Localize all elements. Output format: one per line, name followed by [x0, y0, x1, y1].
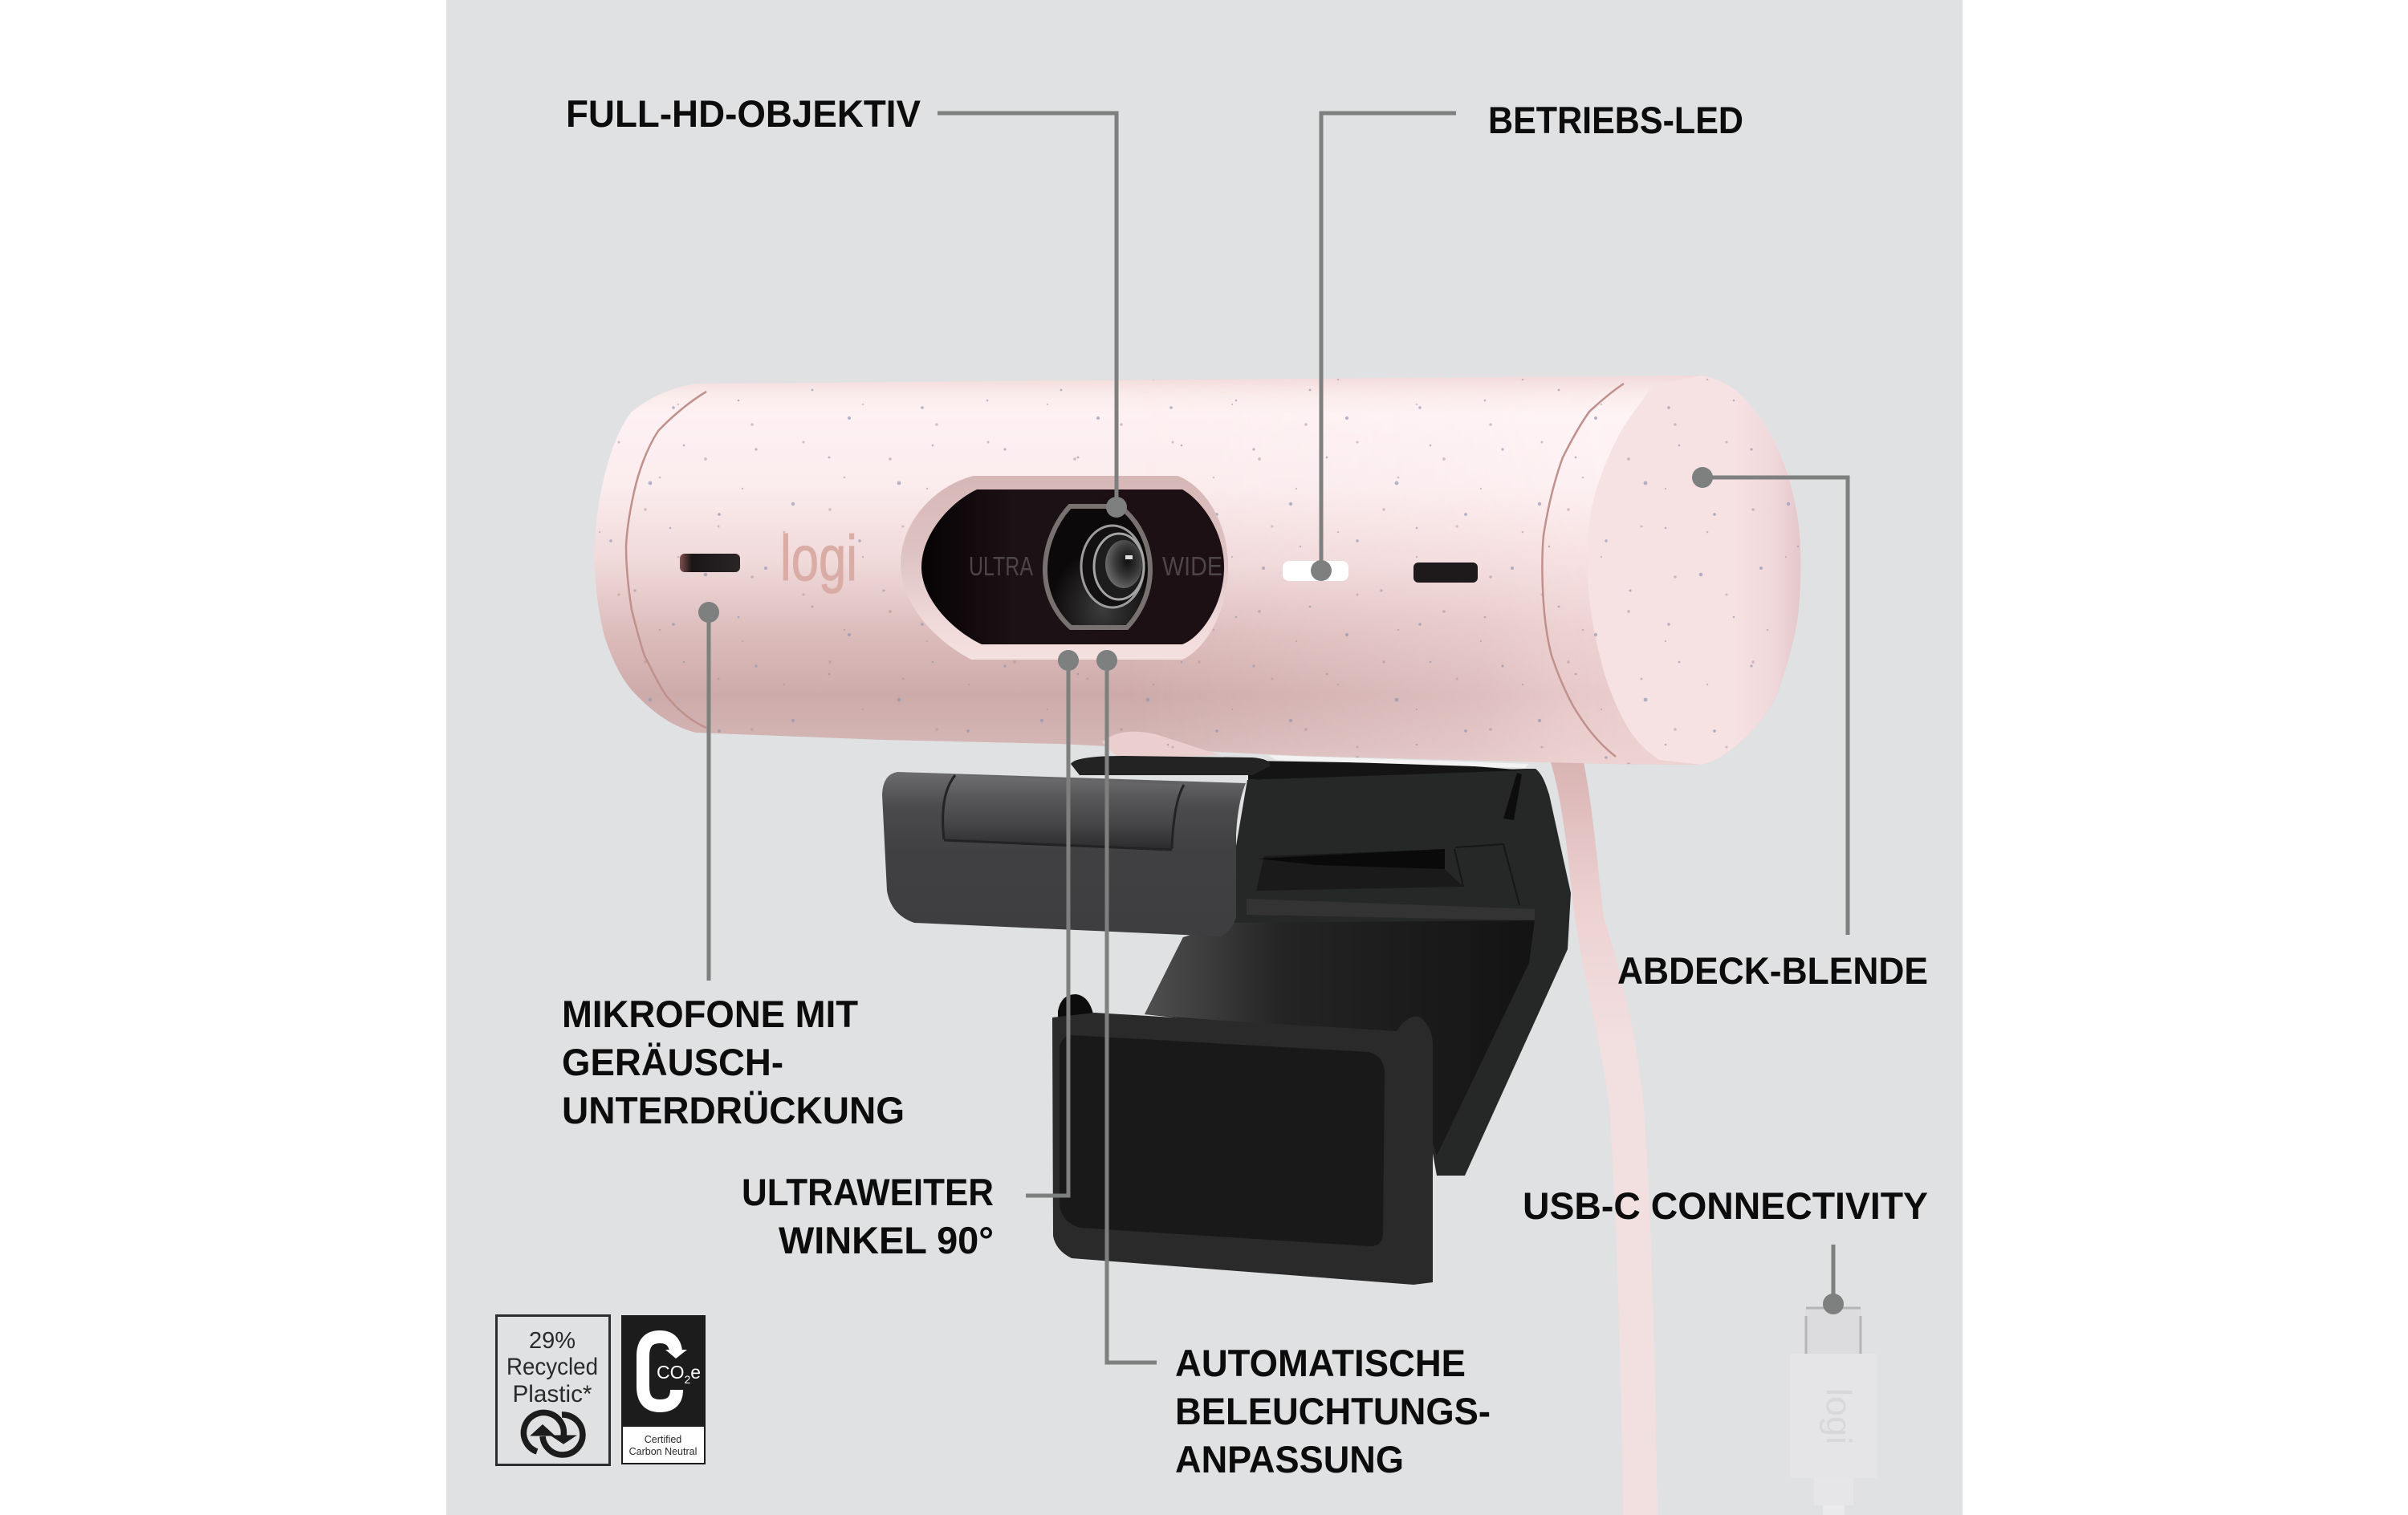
logo: logi: logi [780, 522, 857, 594]
badge: recycled plastic: Recycled [506, 1354, 598, 1380]
stand: top shadow strip [1248, 761, 1525, 780]
callout lines [698, 113, 1848, 1363]
left seam [626, 392, 706, 728]
label: BETRIEBS-LED: BETRIEBS-LED [1488, 99, 1743, 141]
camera barrel [594, 376, 1800, 765]
text: ULTRA: ULTRA [969, 551, 1033, 581]
label: Automatische: AUTOMATISCHE [1175, 1342, 1466, 1384]
CO2e text: 2 [684, 1373, 690, 1386]
callout: ultra wide [1026, 650, 1079, 1196]
badge: carbon neutral: Carbon Neutral [629, 1446, 697, 1457]
panel: grey background [446, 0, 1963, 1515]
plug connector [1805, 1307, 1861, 1354]
label: Mikrofone: UNTERDRÜCKUNG [562, 1089, 905, 1131]
label: FULL-HD-OBJEKTIV: FULL-HD-OBJEKTIV [566, 92, 921, 135]
status LED [1283, 561, 1348, 581]
cable: pink USB cable [1551, 762, 1658, 1515]
stand joint [1102, 732, 1220, 759]
lens bezel [901, 476, 1228, 660]
webcam body [594, 376, 1802, 775]
text: WIDE: WIDE [1162, 551, 1222, 581]
stand: ledge [1247, 899, 1535, 920]
stand: rear dark section [1145, 769, 1571, 1176]
badge text: 29% [529, 1328, 576, 1354]
stand: hinge barrel [943, 775, 1184, 849]
label: Mikrofone: MIKROFONE MIT [562, 993, 858, 1035]
webcam stand [882, 755, 1571, 1285]
label: Ultraweiter Winkel: ULTRAWEITER [742, 1171, 994, 1213]
label: Ultraweiter Winkel: WINKEL 90° [779, 1219, 994, 1261]
end cap face [1588, 376, 1800, 765]
label: Automatische: ANPASSUNG [1175, 1438, 1404, 1480]
badge: carbon neutral [621, 1315, 706, 1464]
certified text: Certified [645, 1434, 681, 1445]
stand: front clip [1052, 1013, 1433, 1285]
callout: LED [1311, 113, 1456, 581]
recycle icon [523, 1412, 583, 1455]
barrel right-side shading [1275, 563, 1700, 765]
lens glass [1081, 526, 1144, 607]
callout: USB-C [1823, 1245, 1844, 1314]
callout: microphones [698, 602, 719, 981]
stand: clip pad [1060, 1035, 1385, 1246]
stand: front hinge block [882, 772, 1246, 936]
stand: clip bump [1058, 994, 1095, 1023]
badge: recycled plastic [496, 1316, 610, 1465]
label: Mikrofone: GERÄUSCH- [562, 1041, 783, 1083]
stand: slot [1256, 849, 1463, 891]
carbon C icon [643, 1337, 687, 1406]
stand: notch [1503, 773, 1522, 820]
CO2e text: CO [657, 1362, 684, 1383]
label: ABDECK-BLENDE: ABDECK-BLENDE [1617, 949, 1928, 992]
label: Automatische: BELEUCHTUNGS- [1175, 1390, 1491, 1432]
plug logo: logi [1819, 1388, 1858, 1444]
callout: Full-HD lens [938, 113, 1127, 518]
lens ring [1045, 506, 1150, 628]
stand: top highlight [1268, 755, 1529, 768]
USB-C plug [1790, 1307, 1877, 1515]
plug housing [1790, 1354, 1877, 1478]
plug cable [1823, 1501, 1845, 1515]
callout: cover [1692, 467, 1848, 935]
speckles [594, 376, 1802, 766]
cap seam [1542, 384, 1624, 757]
badge: recycled plastic: Plastic* [512, 1381, 592, 1407]
stand: arm [1145, 920, 1535, 1156]
pivot disc [1071, 756, 1270, 775]
left microphone [680, 554, 740, 572]
callout: light correction [1096, 650, 1157, 1363]
label: USB-C CONNECTIVITY: USB-C CONNECTIVITY [1523, 1184, 1928, 1227]
lens window [921, 489, 1224, 644]
right microphone [1413, 563, 1478, 583]
CO2e text: e [690, 1362, 701, 1383]
plug strain relief [1814, 1478, 1853, 1505]
